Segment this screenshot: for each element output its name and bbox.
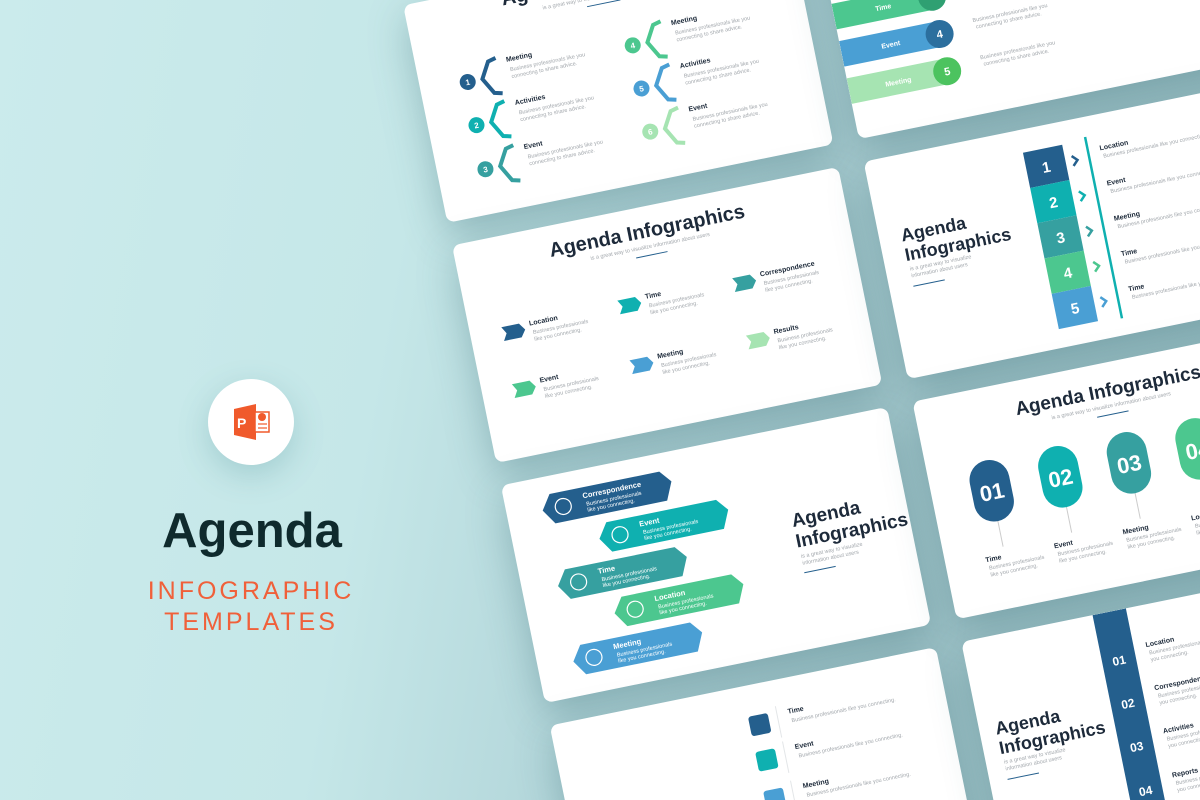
icon: powerpoint circle: P xyxy=(237,415,246,431)
slide C: hexagon banners xyxy=(501,407,931,703)
slide A: bracket chevrons: Business professionals like you xyxy=(692,102,768,123)
slide B: arrow list: Business professionals xyxy=(543,376,600,393)
slide H: bars: Business professionals like you xyxy=(972,3,1048,24)
slide G: vertical bar list: is a great way to visualize xyxy=(1004,747,1066,766)
slide F: numbered pills: Event xyxy=(1053,540,1074,550)
subtitle: infographic templates xyxy=(148,577,354,636)
slide B: arrow list: like you connecting. xyxy=(765,278,814,294)
slide E: numbered column: 3 xyxy=(1055,229,1067,248)
slide B: arrow list: Business professionals xyxy=(532,319,589,336)
slide F: numbered pills: Meeting xyxy=(1122,524,1149,536)
slide E: numbered column: 1 xyxy=(1041,159,1052,177)
slide A: bracket chevrons: Activities xyxy=(514,94,546,107)
slide C: hexagon banners: Correspondence xyxy=(582,480,642,500)
slide D: icon list: Business professionals like you connecting. xyxy=(806,772,912,799)
slide F: numbered pills: 01 xyxy=(978,478,1007,507)
slide C: hexagon banners: Infographics xyxy=(794,509,910,553)
slide G: vertical bar list: you connecting. xyxy=(1159,693,1198,706)
slide G: vertical bar list: Location xyxy=(1145,636,1175,649)
slide E: numbered column: Agenda xyxy=(899,213,969,245)
title: Agenda: Agenda xyxy=(162,504,342,558)
slide G: vertical bar list: Agenda xyxy=(993,706,1063,739)
slide F: numbered pills: Business professionals xyxy=(1126,527,1182,544)
slide G: vertical bar list: 02 xyxy=(1120,696,1136,712)
slide E: numbered column: is a great way to visualize xyxy=(909,254,972,273)
slide C: hexagon banners: like you connecting. xyxy=(587,498,636,514)
slide C: hexagon banners: Location xyxy=(654,588,686,603)
slide B: arrow list: Business professionals xyxy=(648,292,705,309)
slide A: bracket chevrons: Event xyxy=(688,103,709,113)
slide C: hexagon banners: like you connecting. xyxy=(618,649,667,665)
slide B: arrow list: like you connecting. xyxy=(662,360,711,376)
slide D: icon list: Business professionals like you connecting. xyxy=(798,732,904,759)
slide C: hexagon banners: Business professionals xyxy=(643,519,699,536)
slide C: hexagon banners: is a great way to visualize xyxy=(801,542,863,560)
slide A: bracket chevrons: Business professionals like you xyxy=(518,95,595,116)
slide G: vertical bar list: 01 xyxy=(1111,652,1127,669)
slide D: icon list: Meeting xyxy=(802,778,830,790)
slide B: arrow list: like you connecting. xyxy=(650,301,699,316)
slide E: numbered column: Location xyxy=(1099,140,1129,152)
slide A: bracket chevrons: Meeting xyxy=(670,15,698,27)
slide A: bracket chevrons: connecting to share advice. xyxy=(694,110,761,130)
slide F: numbered pills: like you connecting. xyxy=(1127,535,1176,551)
slide A: bracket chevrons: connecting to share advice. xyxy=(520,104,587,123)
slide G: vertical bar list: Reports xyxy=(1172,767,1199,779)
slide E: numbered column: information about users xyxy=(911,262,969,279)
slide H: bars: connecting to share advice. xyxy=(975,11,1043,31)
slide E: numbered column: 2 xyxy=(1048,194,1059,212)
slide B: arrow list: Correspondence xyxy=(759,261,815,279)
slide A: bracket chevrons: 2 xyxy=(474,121,480,130)
slide G: vertical bar list: 04 xyxy=(1138,783,1154,799)
slide G: vertical bar list xyxy=(961,563,1200,800)
slide D: icon list: Time xyxy=(787,706,804,716)
slide H: bars: Time xyxy=(875,3,892,13)
slide C: hexagon banners: like you connecting. xyxy=(659,601,708,616)
slide A: bracket chevrons: 1 xyxy=(465,78,471,87)
slide B: arrow list: Location xyxy=(529,315,559,328)
slide A: bracket chevrons: Business professionals like you xyxy=(683,59,760,80)
slide H: bars: 5 xyxy=(943,66,952,79)
slide B: arrow list: like you connecting. xyxy=(544,384,593,400)
slide F: numbered pills: Business professionals xyxy=(989,555,1045,572)
slide H: bars: connecting to share advice. xyxy=(983,48,1050,68)
slide G: vertical bar list: Infographics xyxy=(997,717,1107,758)
slide F: numbered pills: like you connecting. xyxy=(990,563,1039,579)
slide F: numbered pills: 02 xyxy=(1046,464,1075,493)
slide G: vertical bar list: you connecting. xyxy=(1150,650,1190,663)
slide A: bracket chevrons: connecting to share advice. xyxy=(511,61,578,80)
slide B: arrow list: Time xyxy=(645,291,662,301)
slide B: arrow list: like you connecting. xyxy=(778,336,827,351)
subtitle: infographic templates: TEMPLATES xyxy=(164,608,338,636)
slide C: hexagon banners: Business professionals xyxy=(586,491,642,508)
slide F: numbered pills: Agenda Infographics xyxy=(1013,362,1200,420)
slide A: bracket chevrons: 5 xyxy=(639,84,645,94)
slide B: arrow list: Business professionals xyxy=(777,327,834,344)
slide F: numbered pills xyxy=(912,323,1200,619)
slide B: arrow list: Business professionals xyxy=(661,352,717,369)
slide C: hexagon banners: Time xyxy=(597,564,616,576)
slide A: bracket chevrons: Business professionals like you xyxy=(527,139,603,160)
slide B: arrow list: is a great way to visualize information about users xyxy=(590,232,711,262)
slide A: bracket chevrons: Event xyxy=(523,140,544,151)
slide A: bracket chevrons: connecting to share advice. xyxy=(529,148,596,167)
slide H: bars: Meeting xyxy=(885,77,912,89)
slide B: arrow list: Agenda Infographics xyxy=(547,201,747,262)
slide G: vertical bar list: Activities xyxy=(1163,722,1195,735)
slide A: bracket chevrons: 6 xyxy=(647,127,654,137)
slide A: bracket chevrons: Business professionals like you xyxy=(510,52,586,73)
slide E: numbered column xyxy=(864,83,1200,379)
slide E: numbered column: Meeting xyxy=(1113,211,1141,223)
slide G: vertical bar list: 03 xyxy=(1129,739,1145,755)
slide C: hexagon banners: Business professionals xyxy=(601,566,658,583)
slide D: icon list xyxy=(550,647,980,800)
slide C: hexagon banners: like you connecting. xyxy=(644,526,693,542)
slide B: arrow list: Results xyxy=(773,324,799,336)
slide E: numbered column: Infographics xyxy=(903,224,1013,265)
slide C: hexagon banners: Business professionals xyxy=(617,642,673,659)
slide A: bracket chevrons xyxy=(403,0,833,223)
slide H: bars xyxy=(815,0,1200,139)
slide F: numbered pills: 03 xyxy=(1115,450,1144,479)
slide A: bracket chevrons: connecting to share advice. xyxy=(676,24,743,43)
slide F: numbered pills: Time xyxy=(985,554,1002,564)
slide G: vertical bar list: information about users xyxy=(1005,755,1063,773)
slide E: numbered column: Event xyxy=(1106,177,1127,188)
slide C: hexagon banners: like you connecting. xyxy=(602,574,651,589)
slide E: numbered column: Time xyxy=(1128,283,1145,293)
slide C: hexagon banners: Meeting xyxy=(612,637,642,651)
slide B: arrow list: Business professionals xyxy=(763,270,820,287)
slide C: hexagon banners: Event xyxy=(638,516,661,529)
slide C: hexagon banners: Business professionals xyxy=(658,593,714,610)
subtitle: infographic templates: INFOGRAPHIC xyxy=(148,577,354,605)
slide H: bars: Business professionals like you xyxy=(980,40,1056,61)
slide A: bracket chevrons: Business professionals like you xyxy=(675,15,751,37)
slide D: icon list: Business professionals like you connecting. xyxy=(791,697,897,724)
slide E: numbered column: Time xyxy=(1121,248,1138,258)
slide C: hexagon banners: information about users xyxy=(802,549,860,567)
slide A: bracket chevrons: connecting to share advice. xyxy=(685,67,752,87)
slide C: hexagon banners: Agenda xyxy=(790,497,863,532)
slide H: bars: Event xyxy=(881,40,902,51)
slide A: bracket chevrons: Activities xyxy=(679,57,711,70)
slide F: numbered pills: Business professionals xyxy=(1057,541,1114,558)
slide A: bracket chevrons: Meeting xyxy=(505,52,533,64)
slide A: bracket chevrons: 4 xyxy=(630,41,636,51)
icon: powerpoint circle xyxy=(208,379,294,465)
slide F: numbered pills: like you connecting. xyxy=(1059,549,1108,565)
slides group xyxy=(392,0,1200,800)
slide A: bracket chevrons: 3 xyxy=(482,165,489,175)
slide B: arrow list: Event xyxy=(539,374,560,385)
slide H: bars: 4 xyxy=(936,28,945,41)
slide F: numbered pills: is a great way to visualize information about users xyxy=(1051,391,1172,421)
slide B: arrow list: like you connecting. xyxy=(534,327,583,343)
slide B: arrow list xyxy=(452,167,882,463)
slide D: icon list: Event xyxy=(794,740,815,751)
slide B: arrow list: Meeting xyxy=(657,349,684,361)
slide E: numbered column: 4 xyxy=(1062,264,1074,283)
slide E: numbered column: 5 xyxy=(1069,300,1081,318)
